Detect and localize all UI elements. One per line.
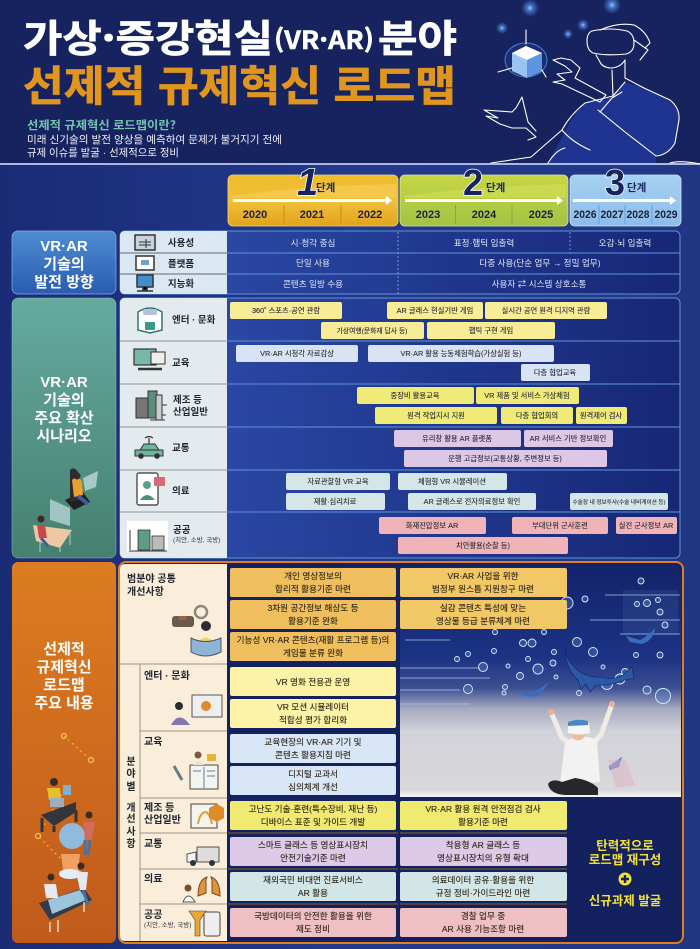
section: entertainment: VR 영화 전용관 운영: [276, 677, 350, 687]
bar: records: AR 글래스로 전자의료정보 확인: [424, 497, 520, 506]
intro text: 규제 이슈를 발굴 · 선제적으로 정비: [27, 147, 179, 159]
intro text: 선제적 규제혁신 로드맵이란?: [27, 117, 176, 133]
bar: VR education: [286, 473, 390, 490]
stage 2 header: 2: [463, 162, 483, 203]
panel label: diffusion scenarios: [12, 298, 116, 558]
bar: live remote: 실시간 공연 원격 디지역 관람: [502, 306, 591, 315]
bar: rehab: 재활·심리치료: [314, 497, 357, 506]
vertical heading: by field: 항: [126, 837, 136, 850]
bar: surgery: [570, 493, 668, 510]
vertical heading: by field: 개: [126, 801, 136, 814]
bar: heavy equipment: 중장비 활용교육: [390, 391, 440, 400]
section: entertainment: VR 모션 시뮬레이터: [277, 702, 349, 712]
section: medical: AR 활용: [298, 887, 328, 898]
row: public: [127, 517, 677, 554]
stage 2 header: 2025: [529, 209, 553, 221]
illustration: people using VR: [33, 468, 98, 552]
bar: live remote: [485, 302, 607, 319]
title: 분야: [378, 8, 457, 63]
section: transport: 안전기술기준 마련: [280, 853, 346, 863]
section: public: 공공: [144, 909, 162, 921]
icon: person with gears: [172, 606, 221, 656]
callout: flexible roadmap: 탄력적으로: [596, 835, 654, 854]
bar: windshield AR: 유리창 활용 AR 플랫폼: [422, 434, 492, 443]
illustration: VR user line art: [484, 0, 700, 164]
row: public: 공공: [173, 525, 191, 536]
panel: development direction table: 사용성: [168, 237, 194, 249]
section: manufacturing: [144, 801, 567, 830]
section: public: AR 사용 기능조항 마련: [442, 924, 524, 934]
icon: usability: [135, 235, 155, 250]
section: transport: [144, 837, 567, 866]
icon: city: [127, 521, 168, 551]
bars: common right: 범정부 원스톱 지원창구 마련: [432, 584, 534, 594]
child: [548, 701, 635, 795]
panel label: diffusion scenarios: 주요 확산: [34, 410, 94, 427]
section: transport: 스마트 글래스 등 영상표시장치: [258, 840, 368, 850]
panel label: roadmap contents: 주요 내용: [34, 695, 94, 712]
bar: AR services: [524, 430, 613, 447]
bar: virtual travel: 가상여행(문화재 답사 등): [337, 326, 407, 335]
icon: lungs: [183, 877, 220, 902]
bar: audiovisual: VR·AR 시청각 자료감상: [260, 349, 334, 358]
section: medical: 규정 정비·가이드라인 마련: [436, 888, 530, 898]
bar: AR services: AR 서비스 기반 정보확인: [530, 434, 606, 443]
panel: development direction table: [120, 231, 680, 294]
section: manufacturing: 고난도 기술·훈련(특수장비, 재난 등): [249, 803, 378, 814]
stage 1 header: 1: [297, 162, 318, 204]
section: medical: 의료데이터 공유·활용을 위한: [432, 874, 534, 885]
bar: VR education: 자료관찰형 VR 교육: [307, 477, 369, 486]
row: education: [134, 345, 590, 381]
bar: virtual travel: [321, 322, 424, 339]
icon: computers: [134, 349, 165, 369]
intro text: 미래 신기술의 발전 양상을 예측하여 문제가 불거지기 전에: [27, 133, 282, 146]
stage 3 header: 2028: [626, 209, 650, 221]
callout: flexible roadmap: 로드맵 재구성: [589, 849, 661, 868]
bar: haptic game: 햅틱 구현 게임: [469, 326, 513, 335]
bar: VR products: [476, 387, 579, 404]
section: transport: 영상표시장치의 유형 확대: [437, 852, 529, 863]
bar: AR glasses game: AR 글래스 현실기반 게임: [397, 306, 473, 315]
icon: video viewer: [171, 695, 222, 725]
icon: VR headset: [138, 308, 162, 333]
section: education: 디지털 교과서: [288, 768, 338, 779]
panel label: development direction: VR·AR: [40, 238, 88, 255]
section: manufacturing: 활용기준 마련: [458, 816, 508, 827]
row: entertainment: [138, 302, 607, 339]
panel: development direction table: 사용자 ⇄ 시스템 상호소통: [492, 278, 586, 289]
panel label: development direction: 기술의: [43, 256, 85, 273]
bar: AR glasses game: [387, 302, 483, 319]
callout: flexible roadmap: 신규과제 발굴: [589, 890, 661, 909]
callout: flexible roadmap: [589, 835, 661, 909]
icon: platform: [136, 256, 154, 270]
intro text: [27, 117, 282, 159]
section: entertainment: 적합성 평가 합리화: [279, 714, 347, 725]
bar: rehab: [286, 493, 385, 510]
panel: development direction table: 표정·햅틱 입출력: [454, 237, 514, 248]
stage 2 header: 2023: [416, 209, 440, 221]
section: public: 제도 정비: [296, 924, 330, 934]
stage 2 header: [400, 162, 568, 226]
bar: military training: [512, 517, 608, 534]
panel label: roadmap contents: [12, 562, 116, 943]
row: transport: 교통: [172, 443, 190, 454]
bar: military AR: [616, 517, 677, 534]
row: transport: [135, 430, 613, 467]
icon: doctor tablet: [137, 473, 165, 505]
bar: 360 sports: [230, 302, 342, 319]
bar: police: 치안활용(순찰 등): [456, 541, 510, 550]
stage 2 header: 단계: [486, 181, 505, 194]
vertical heading: by field: [126, 756, 136, 850]
bar: driving info: 운행 고급정보(교통상황, 주변정보 등): [448, 454, 562, 463]
panel: roadmap contents: [119, 562, 683, 943]
section: manufacturing: 디바이스 표준 및 가이드 개발: [261, 816, 365, 827]
section: medical: 재외국민 비대면 진료서비스: [263, 874, 363, 885]
section: education: 심의체계 개선: [288, 781, 338, 792]
panel: development direction table: 시·청각 중심: [291, 237, 335, 248]
bars: common right: 영상물 등급 분류체계 마련: [436, 615, 530, 626]
title: [23, 8, 457, 114]
section: education: 교육: [144, 736, 162, 748]
vertical heading: by field: 분: [126, 756, 136, 768]
bars: common right: [400, 568, 567, 629]
stage 1 header: 단계: [316, 181, 335, 194]
bar: heavy equipment: [357, 387, 474, 404]
section: public: 경찰 업무 중: [461, 910, 505, 921]
section: medical: 의료: [144, 873, 162, 885]
section: public: (치안, 소방, 국방): [144, 920, 191, 929]
section: medical: [144, 872, 567, 902]
section: manufacturing: 제조 등: [144, 801, 174, 814]
icon: plus: [618, 872, 632, 886]
stage 1 header: 2022: [358, 209, 382, 221]
stage 1 header: [228, 162, 398, 226]
section: manufacturing: VR·AR 활용 원격 안전점검 검사: [425, 803, 541, 814]
bar: active learning: VR·AR 활용 능동체험학습(가상실험 등): [401, 349, 521, 358]
row: manufacturing: 제조 등: [173, 394, 202, 406]
panel: development direction table: 플랫폼: [168, 258, 194, 270]
panel label: development direction: 발전 방향: [34, 274, 94, 291]
section: education: 교육현장의 VR·AR 기기 및: [264, 736, 362, 747]
section: entertainment: 엔터 · 문화: [144, 669, 190, 682]
icon: flashlight and tablet: [189, 911, 220, 936]
bar: collaborative meeting: [501, 407, 573, 424]
bar: remote work: 원격 작업지시 지원: [407, 411, 465, 420]
panel: development direction table: 다중 사용(단순 업무 → 정밀 업무): [479, 257, 601, 268]
panel label: development direction: [12, 231, 116, 294]
bar: collaborative: [521, 364, 590, 381]
icon: truck: [187, 847, 219, 866]
bar: windshield AR: [394, 430, 521, 447]
bar: haptic game: [427, 322, 555, 339]
stage 2 header: 2024: [472, 209, 497, 221]
bar: police: [398, 537, 568, 554]
panel label: roadmap contents: 규제혁신: [36, 659, 92, 676]
title: 가상·증강현실: [23, 8, 273, 63]
bar: remote inspection: 원격제어 검사: [580, 411, 622, 420]
vertical heading: by field: 선: [126, 812, 136, 825]
whale: small lower: [518, 682, 548, 697]
whale: upper right: [626, 628, 655, 644]
bars: common left: 합리적 활용기준 마련: [275, 583, 351, 594]
row: medical: [137, 473, 668, 510]
bar: fire AR: 화재진압정보 AR: [406, 521, 458, 530]
bars: common left: 활용기준 완화: [288, 615, 338, 626]
bar: military AR: 실전 군사정보 AR: [619, 521, 673, 530]
icon: car: [135, 436, 163, 459]
stage 1 header: 2020: [243, 209, 267, 221]
bar: surgery: 수술장 내 정보투사(수술 내비게이션 등): [572, 498, 666, 506]
title: 선제적 규제혁신 로드맵: [23, 53, 456, 114]
stage 3 header: 단계: [627, 181, 646, 194]
photo: child in VR with whales: [400, 565, 681, 797]
bar: audiovisual: [236, 345, 358, 362]
section: public: 국방데이터의 안전한 활용을 위한: [254, 910, 372, 921]
row: medical: 의료: [172, 486, 190, 497]
stage 3 header: 2027: [600, 209, 624, 221]
section: transport: 착용형 AR 글래스 등: [446, 840, 520, 850]
bar: collaborative meeting: 다층 협업회의: [516, 411, 558, 420]
bar: active learning: [368, 345, 554, 362]
panel: development direction table: 지능화: [168, 278, 194, 290]
row: manufacturing: [136, 387, 627, 424]
heading: common improvements: [127, 572, 176, 598]
section: education: [144, 734, 396, 795]
bars: common right: 실감 콘텐츠 특성에 맞는: [440, 602, 526, 613]
row: education: 교육: [172, 358, 190, 369]
panel: scenarios table: [120, 298, 680, 558]
stage 3 header: 2026: [574, 209, 596, 221]
icon: book and teacher: [174, 752, 218, 789]
stage 1 header: 2021: [300, 209, 324, 221]
row: public: (치안, 소방, 국방): [173, 535, 220, 544]
header band: [0, 0, 700, 165]
panel label: roadmap contents: 로드맵: [43, 677, 85, 694]
bars: common left: [230, 568, 396, 661]
panel: development direction table: 단일 사용: [296, 258, 330, 268]
bar: driving info: [404, 450, 607, 467]
section: transport: 교통: [144, 838, 162, 850]
stage 3 header: 2029: [654, 209, 678, 221]
vertical heading: by field: 야: [126, 768, 136, 780]
bar: 360 sports: 360˚ 스포츠·공연 관람: [252, 306, 320, 315]
bars: common left: 게임물 분류 완화: [283, 647, 343, 658]
vertical heading: by field: 사: [126, 825, 136, 838]
bar: records: [408, 493, 536, 510]
heading: common improvements: 개선사항: [127, 585, 164, 598]
section: manufacturing: 산업일반: [144, 813, 181, 826]
title: (VR·AR): [274, 21, 374, 57]
bar: remote work: [375, 407, 497, 424]
stage 3 header: [570, 162, 681, 226]
section: public: [144, 908, 567, 937]
panel: development direction table: 콘텐츠 일방 수용: [283, 279, 343, 289]
bars: common right: VR·AR 사업을 위한: [447, 571, 519, 581]
row: manufacturing: 산업일반: [173, 406, 208, 418]
icon: intelligence: [137, 275, 153, 291]
section: education: 콘텐츠 활용지침 마련: [275, 749, 351, 760]
bar: remote inspection: [576, 407, 627, 424]
section: entertainment: [144, 667, 396, 728]
panel label: diffusion scenarios: 시나리오: [36, 428, 92, 445]
icon: robot arm: [191, 804, 224, 828]
illustration: workers with VR: [36, 734, 95, 932]
bars: common left: 개인 영상정보의: [284, 571, 342, 581]
bar: simulation: 체험형 VR 시뮬레이션: [418, 477, 486, 486]
bars: common left: 3차원 공간정보 해상도 등: [267, 603, 359, 613]
stage 3 header: 3: [605, 162, 625, 203]
heading: common improvements: 범분야 공통: [127, 572, 176, 585]
bar: simulation: [398, 473, 507, 490]
whale: large: [565, 648, 634, 692]
icon: person with gears: 360: [178, 616, 187, 622]
panel label: roadmap contents: 선제적: [43, 641, 85, 658]
panel label: diffusion scenarios: 기술의: [43, 392, 85, 409]
vertical heading: by field: 별: [126, 780, 136, 793]
bar: collaborative: 다층 협업교육: [534, 368, 576, 377]
panel: development direction table: 오감·뇌 입출력: [599, 237, 651, 248]
bars: common left: 기능성 VR·AR 콘텐츠(재활 프로그램 등)의: [237, 634, 389, 645]
bar: military training: 부대단위 군사훈련: [532, 521, 588, 530]
bar: fire AR: [379, 517, 486, 534]
bar: VR products: VR 제품 및 서비스 가상체험: [484, 391, 570, 400]
row: entertainment: 엔터 · 문화: [172, 314, 216, 326]
panel label: diffusion scenarios: VR·AR: [40, 374, 88, 391]
icon: factory: [136, 391, 167, 420]
